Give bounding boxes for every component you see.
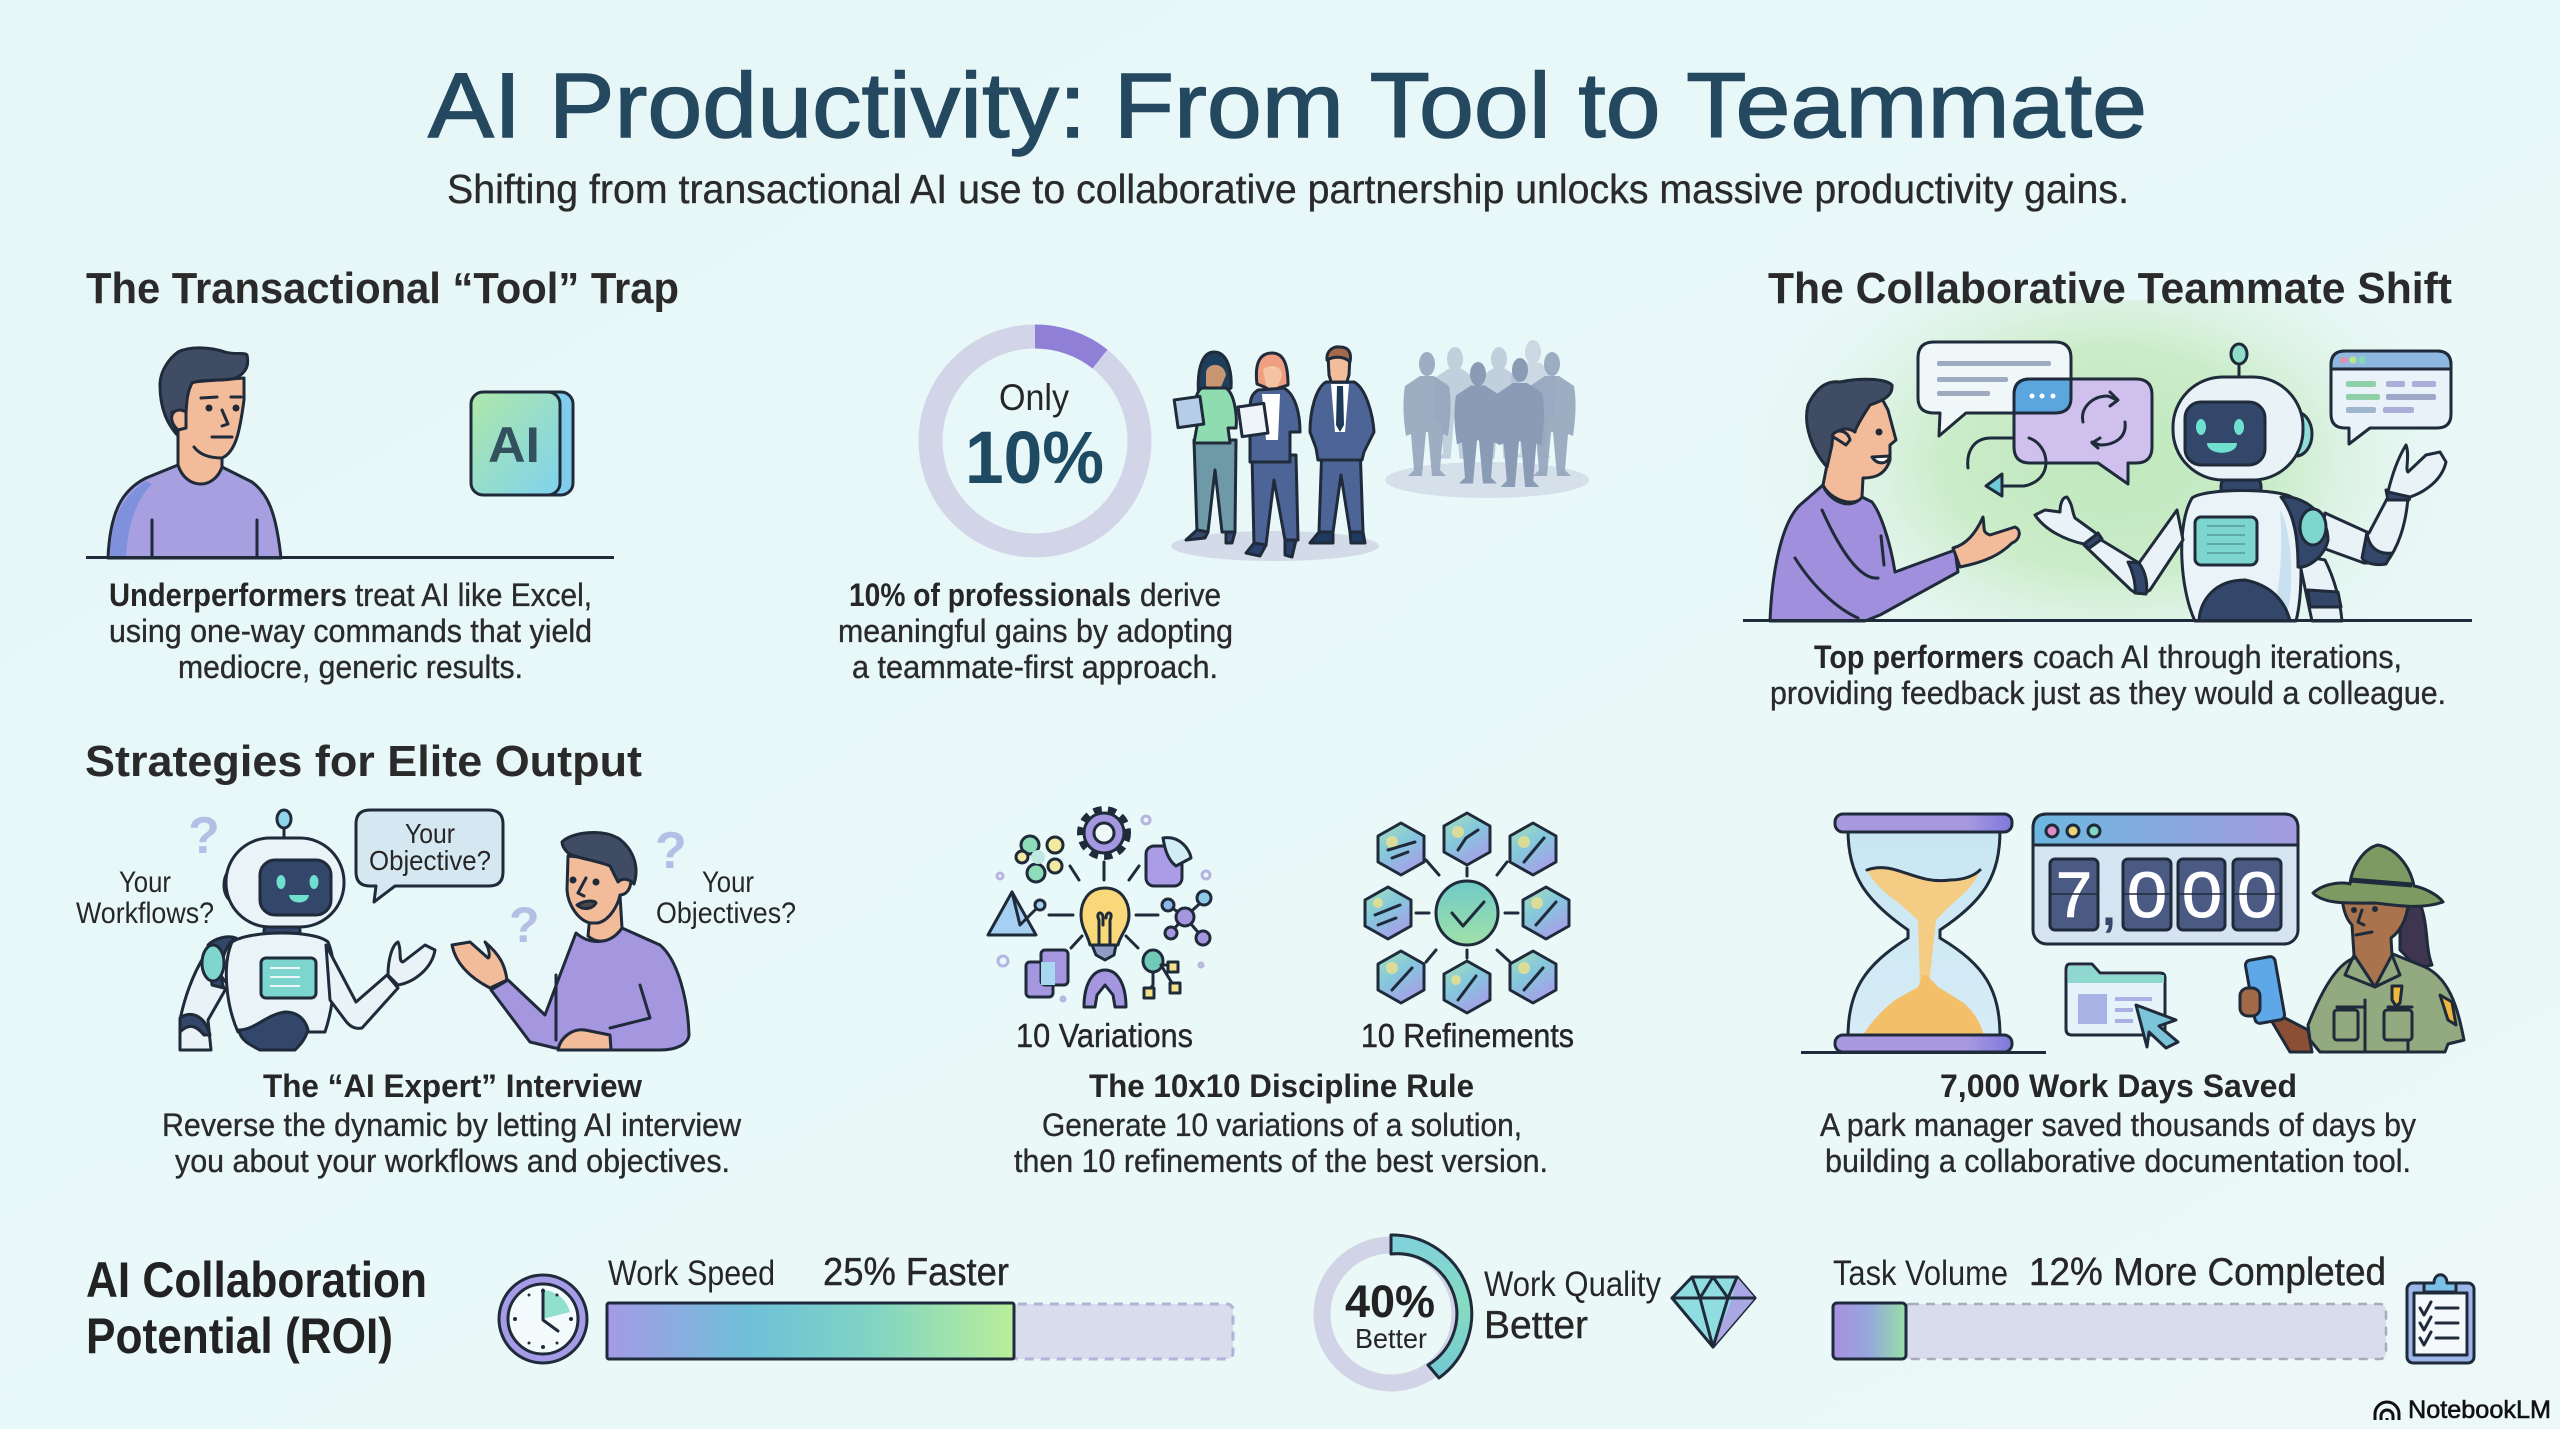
counter window: 7,000: 7 bbox=[2056, 859, 2092, 931]
text: underperformers: Underperformers bbox=[109, 577, 347, 613]
text: AI expert interview: you about your workflows and objectives. bbox=[175, 1143, 730, 1179]
icon: AI response bubble bbox=[2331, 351, 2451, 444]
counter window: 7,000: 0 bbox=[2127, 859, 2167, 931]
text: ten percent of professionals bbox=[838, 577, 1233, 685]
label: your workflows: Your bbox=[119, 866, 171, 899]
illustration: robot teammate bbox=[2035, 344, 2446, 621]
heading: strategies: Strategies for Elite Output bbox=[85, 737, 642, 786]
subtitle: Shifting from transactional AI use to collaborative partnership unlocks massive productivity gains. bbox=[447, 166, 2129, 212]
icon: iteration bubble bbox=[1968, 379, 2152, 496]
ground line bbox=[1743, 619, 2472, 622]
counter window: 7,000: 0 bbox=[2182, 859, 2222, 931]
label: your workflows bbox=[76, 866, 214, 930]
illustration: man at desk bbox=[108, 348, 281, 558]
text: top performers bbox=[1770, 639, 2446, 711]
illustration: robot interviewing bbox=[180, 810, 435, 1050]
heading: teammate shift: The Collaborative Teammate Shift bbox=[1768, 264, 2452, 313]
panel: 7,000 work days saved bbox=[1801, 814, 2464, 1179]
metric: work quality: Better bbox=[1484, 1304, 1588, 1347]
icon cluster: 10 variations bbox=[988, 810, 1211, 1007]
title: AI Productivity: From Tool to Teammate bbox=[428, 55, 2147, 157]
metric: work speed: Work Speed bbox=[608, 1254, 775, 1293]
text: ten percent of professionals: meaningful gains by adopting bbox=[838, 613, 1233, 649]
metric: task volume: Task Volume bbox=[1833, 1254, 2008, 1293]
label: your objectives: Your bbox=[702, 866, 754, 899]
ground line bbox=[1801, 1051, 2046, 1054]
label: 10 variations: 10 Variations bbox=[1016, 1017, 1193, 1054]
icon: hourglass bbox=[1835, 814, 2012, 1052]
panel: AI expert interview bbox=[76, 807, 796, 1179]
illustration: park ranger bbox=[2240, 845, 2464, 1052]
donut chart: 10 percent bbox=[930, 336, 1140, 546]
heading: AI collaboration potential: AI Collaboration bbox=[86, 1252, 427, 1308]
robot leg bbox=[2298, 555, 2342, 621]
woman with tablet bbox=[1174, 352, 1236, 543]
metric: work quality bbox=[1484, 1265, 1661, 1347]
callout: your objective: Your bbox=[405, 818, 455, 849]
metric: work quality: Work Quality bbox=[1484, 1265, 1661, 1304]
icon cluster: 10 refinements bbox=[1365, 813, 1569, 1013]
icon: folder and cursor bbox=[2066, 964, 2178, 1048]
heading: AI collaboration potential bbox=[86, 1252, 427, 1364]
text: ten percent of professionals: 10% of professionals bbox=[849, 577, 1131, 613]
metric: task volume: 12% More Completed bbox=[2029, 1251, 2386, 1294]
donut chart: 10 percent: Only bbox=[999, 377, 1069, 418]
text: underperformers: using one-way commands that yield bbox=[109, 613, 592, 649]
text: top performers: Top performers bbox=[1814, 639, 2024, 675]
illustration: faded crowd bbox=[1385, 340, 1589, 498]
counter window: 7,000 bbox=[2033, 814, 2298, 944]
heading: tool trap: The Transactional “Tool” Trap bbox=[86, 264, 679, 313]
illustration: man being interviewed bbox=[452, 832, 689, 1050]
illustration: three professionals bbox=[1171, 347, 1379, 561]
panel: transactional tool trap bbox=[86, 264, 679, 685]
icon: user speech bubble bbox=[1918, 342, 2071, 436]
text: AI expert interview bbox=[162, 1068, 742, 1179]
woman with clipboard bbox=[1238, 353, 1300, 557]
callout: your objective bbox=[356, 810, 503, 902]
icon: AI tool card: AI bbox=[488, 417, 540, 473]
text: top performers: coach AI through iterations, bbox=[2033, 639, 2402, 675]
label: 10 refinements: 10 Refinements bbox=[1361, 1017, 1574, 1054]
text: AI expert interview: The “AI Expert” Interview bbox=[263, 1068, 642, 1104]
icon: clipboard bbox=[2407, 1275, 2474, 1363]
text: work days saved: 7,000 Work Days Saved bbox=[1940, 1068, 2297, 1104]
text: discipline rule: then 10 refinements of the best version. bbox=[1014, 1143, 1548, 1179]
icon: diamond bbox=[1672, 1277, 1755, 1347]
counter window: 7,000: , bbox=[2102, 880, 2116, 936]
panel: only 10 percent bbox=[838, 336, 1589, 685]
donut chart: 40 percent better: 40% bbox=[1345, 1276, 1435, 1327]
icon: clock bbox=[499, 1275, 587, 1363]
text: discipline rule: The 10x10 Discipline Rule bbox=[1089, 1068, 1474, 1104]
icons: question marks: ? bbox=[655, 822, 687, 880]
text: discipline rule bbox=[1014, 1068, 1548, 1179]
illustration: man talking bbox=[1770, 379, 2019, 621]
background glow bbox=[1823, 300, 2397, 619]
label: your workflows: Workflows? bbox=[76, 897, 214, 930]
donut chart: 40 percent better bbox=[1322, 1235, 1472, 1383]
icons: question marks: ? bbox=[509, 897, 540, 953]
icons: question marks: ? bbox=[188, 807, 220, 865]
icons: question marks bbox=[188, 807, 687, 953]
text: underperformers bbox=[109, 577, 592, 685]
counter window: 7,000: 0 bbox=[2237, 859, 2277, 931]
panel: collaborative teammate shift bbox=[1743, 272, 2472, 711]
ground line bbox=[86, 556, 614, 559]
icon: AI tool card bbox=[471, 392, 573, 495]
text: work days saved bbox=[1820, 1068, 2416, 1179]
text: AI expert interview: Reverse the dynamic by letting AI interview bbox=[162, 1107, 742, 1143]
metric: task volume bbox=[1833, 1251, 2386, 1359]
label: your objectives: Objectives? bbox=[656, 897, 796, 930]
panel: 10x10 discipline rule bbox=[988, 810, 1574, 1179]
robot left arm bbox=[2035, 497, 2183, 594]
robot right arm bbox=[2320, 445, 2446, 565]
text: underperformers: treat AI like Excel, bbox=[355, 577, 592, 613]
text: work days saved: A park manager saved thousands of days by bbox=[1820, 1107, 2416, 1143]
heading: AI collaboration potential: Potential (ROI) bbox=[86, 1308, 393, 1364]
text: top performers: providing feedback just as they would a colleague. bbox=[1770, 675, 2446, 711]
text: work days saved: building a collaborative documentation tool. bbox=[1825, 1143, 2411, 1179]
man in suit bbox=[1310, 347, 1374, 543]
text: ten percent of professionals: derive bbox=[1140, 577, 1221, 613]
callout: your objective: Objective? bbox=[369, 845, 491, 876]
donut chart: 40 percent better: Better bbox=[1355, 1323, 1427, 1354]
text: underperformers: mediocre, generic results. bbox=[178, 649, 523, 685]
panel: ROI strip bbox=[86, 1235, 2474, 1383]
label: your objectives bbox=[656, 866, 796, 930]
metric: work speed bbox=[607, 1251, 1233, 1359]
text: ten percent of professionals: a teammate-first approach. bbox=[852, 649, 1218, 685]
text: discipline rule: Generate 10 variations of a solution, bbox=[1042, 1107, 1522, 1143]
donut chart: 10 percent: 10% bbox=[965, 416, 1104, 499]
NotebookLM watermark: NotebookLM bbox=[2408, 1396, 2551, 1424]
robot torso bbox=[2182, 490, 2301, 621]
metric: work speed: 25% Faster bbox=[823, 1251, 1009, 1294]
